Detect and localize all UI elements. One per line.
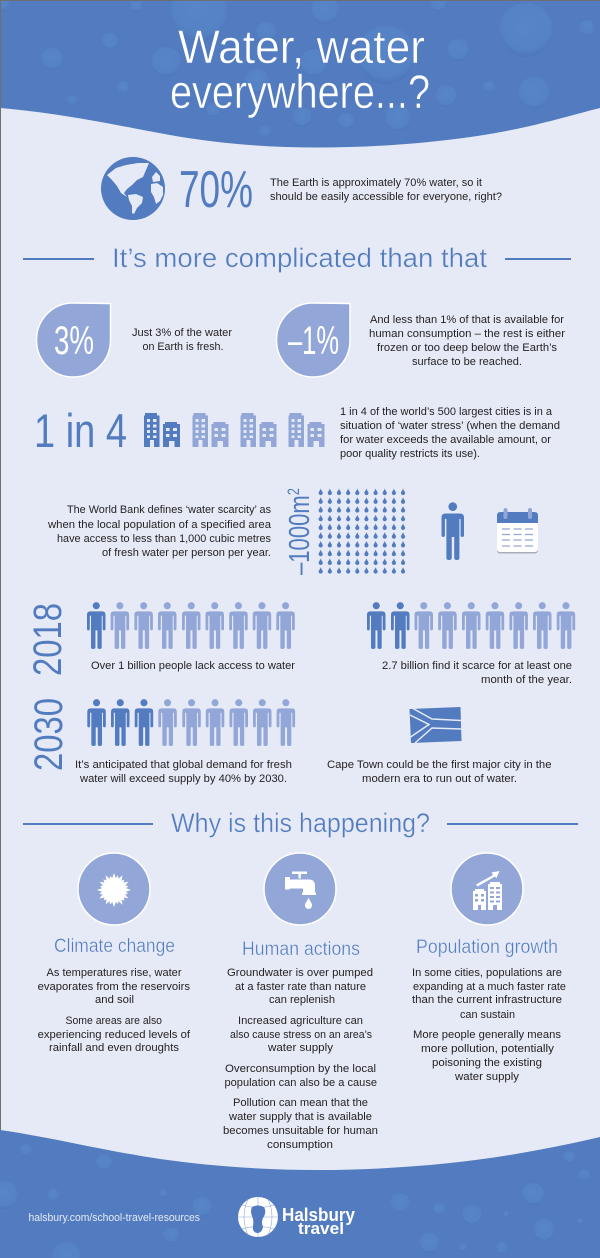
text: human actions details: can replenish — [269, 994, 335, 1006]
header wave banner with water droplets — [0, 0, 600, 148]
title: everywhere...? — [170, 65, 430, 118]
heading: population growth: Population growth — [416, 937, 558, 958]
text: human actions details: Increased agriculture can — [238, 1015, 363, 1027]
text: population growth details: poisoning the existing — [432, 1057, 542, 1069]
text: water scarcity definition: when the local population of a specified area — [47, 519, 272, 531]
text: water scarcity definition: The World Bank defines ‘water scarcity’ as — [67, 504, 271, 516]
text: 2.7 billion: month of the year. — [481, 674, 572, 686]
text: climate change details: evaporates from the reservoirs — [38, 981, 191, 993]
text: human actions details: water supply that is available — [228, 1111, 372, 1123]
icon: city growth arrow — [451, 853, 523, 925]
drop: 3% — [36, 303, 110, 377]
text: climate change details: rainfall and even droughts — [49, 1042, 180, 1054]
footer wave banner with water droplets — [0, 1130, 600, 1258]
icon: person — [442, 502, 464, 560]
text: human actions details — [223, 967, 378, 1151]
panel: human actions — [223, 853, 378, 1151]
heading: climate change: Climate change — [54, 936, 175, 957]
text: human actions details: Overconsumption by the local — [225, 1063, 376, 1075]
text: water stress: 1 in 4 of the world’s 500 largest cities is in a — [340, 406, 553, 418]
logo wordmark: travel — [298, 1219, 344, 1238]
text: climate change details — [38, 967, 191, 1054]
text: cape town: modern era to run out of water. — [362, 773, 517, 785]
panel: climate change — [38, 853, 191, 1054]
title — [170, 20, 430, 118]
text: climate change details: As temperatures rise, water — [46, 967, 182, 979]
text: human actions details: becomes unsuitable for human — [223, 1125, 378, 1137]
text: under 1% available: human consumption – the rest is either — [369, 328, 565, 340]
icon: south africa flag — [410, 707, 462, 743]
stat: 1 in 4: 1 in 4 — [34, 404, 127, 457]
text: global demand — [75, 759, 292, 785]
label: under 1000 cubic metres: –1000m — [284, 470, 316, 575]
text: water scarcity definition: have access to less than 1,000 cubic metres — [57, 533, 271, 545]
text: population growth details — [412, 967, 566, 1083]
text: 3% fresh: on Earth is fresh. — [142, 341, 224, 353]
section heading: more complicated: It’s more complicated than that — [112, 243, 487, 273]
text: under 1% available — [369, 314, 565, 368]
text: population growth details: than the current infrastructure — [412, 994, 562, 1006]
text: water scarcity definition: of fresh water per person per year. — [102, 547, 271, 559]
text: earth is 70% water: The Earth is approximately 70% water, so it — [270, 177, 482, 189]
text: human actions details: population can also be a cause — [224, 1077, 377, 1089]
icon: globe — [101, 157, 165, 220]
text: over 1 billion: Over 1 billion people lack access to water — [91, 660, 295, 672]
icon: calendar — [497, 508, 538, 554]
people row: 1 billion — [87, 602, 295, 649]
text: 3% fresh: Just 3% of the water — [132, 327, 232, 339]
footer url: halsbury.com/school-travel-resources — [28, 1212, 200, 1224]
section heading: why is this happening: Why is this happening? — [171, 808, 430, 838]
text: climate change details: and soil — [95, 994, 134, 1006]
text: water stress — [340, 406, 560, 460]
text: population growth details: can sustain — [460, 1009, 515, 1021]
text: cape town: Cape Town could be the first major city in the — [327, 759, 552, 771]
icon grid: water drops — [319, 488, 405, 574]
text: human actions details: at a faster rate than nature — [235, 981, 366, 993]
heading: human actions: Human actions — [242, 939, 360, 960]
text: human actions details: Groundwater is over pumped — [227, 967, 373, 979]
title: Water, water — [178, 20, 425, 73]
text: global demand: water will exceed supply by 40% by 2030. — [79, 773, 287, 785]
text: water stress: poor quality restricts its use). — [340, 448, 480, 460]
logo: halsbury travel — [238, 1197, 356, 1238]
text: population growth details: More people generally means — [413, 1029, 562, 1041]
text: 3% fresh — [132, 327, 232, 353]
stat: 70%: 70% — [179, 161, 253, 219]
year label: 2030: 2030 — [27, 698, 71, 771]
drop: 3%: 3% — [54, 319, 94, 363]
people row: 2030 demand — [87, 699, 295, 746]
label: under 1000 cubic metres: 2 — [284, 488, 303, 495]
people row: 2.7 billion — [367, 602, 575, 649]
text: cape town — [327, 759, 552, 785]
text: human actions details: consumption — [267, 1139, 333, 1151]
panel: population growth — [412, 853, 566, 1083]
text: human actions details: Pollution can mean that the — [233, 1097, 368, 1109]
text: population growth details: In some cities, populations are — [412, 967, 562, 979]
text: water stress: situation of ‘water stress’ (when the demand — [340, 420, 560, 432]
text: climate change details: Some areas are also — [66, 1015, 162, 1027]
year label: 2018: 2018 — [26, 603, 70, 676]
text: earth is 70% water: should be easily accessible for everyone, right? — [270, 191, 502, 203]
logo wordmark — [282, 1204, 356, 1238]
drop: under 1% — [276, 303, 350, 377]
text: population growth details: water supply — [454, 1071, 520, 1083]
text: under 1% available: And less than 1% of that is available for — [370, 314, 564, 326]
text: water stress: for water exceeds the available amount, or — [340, 434, 551, 446]
icon: sun — [78, 853, 150, 925]
text: human actions details: also cause stress on an area’s — [230, 1029, 372, 1041]
text: earth is 70% water — [270, 177, 502, 203]
text: 2.7 billion — [382, 660, 572, 686]
text: global demand: It’s anticipated that global demand for fresh — [75, 759, 292, 771]
text: population growth details: more pollution, potentially — [421, 1043, 555, 1055]
text: 2.7 billion: 2.7 billion find it scarce for at least one — [382, 660, 572, 672]
text: under 1% available: frozen or too deep below the Earth’s — [377, 342, 557, 354]
drop: under 1%: –1% — [288, 319, 339, 363]
logo wordmark: Halsbury — [282, 1204, 356, 1225]
text: population growth details: expanding at a much faster rate — [413, 981, 566, 993]
text: water scarcity definition — [47, 504, 272, 559]
icons: four city buildings — [144, 413, 324, 447]
text: climate change details: experiencing reduced levels of — [38, 1029, 191, 1041]
logo icon: globe with footprint — [238, 1197, 278, 1237]
text: under 1% available: surface to be reached. — [412, 356, 522, 368]
text: human actions details: water supply — [267, 1042, 334, 1054]
icon: tap — [264, 853, 336, 925]
